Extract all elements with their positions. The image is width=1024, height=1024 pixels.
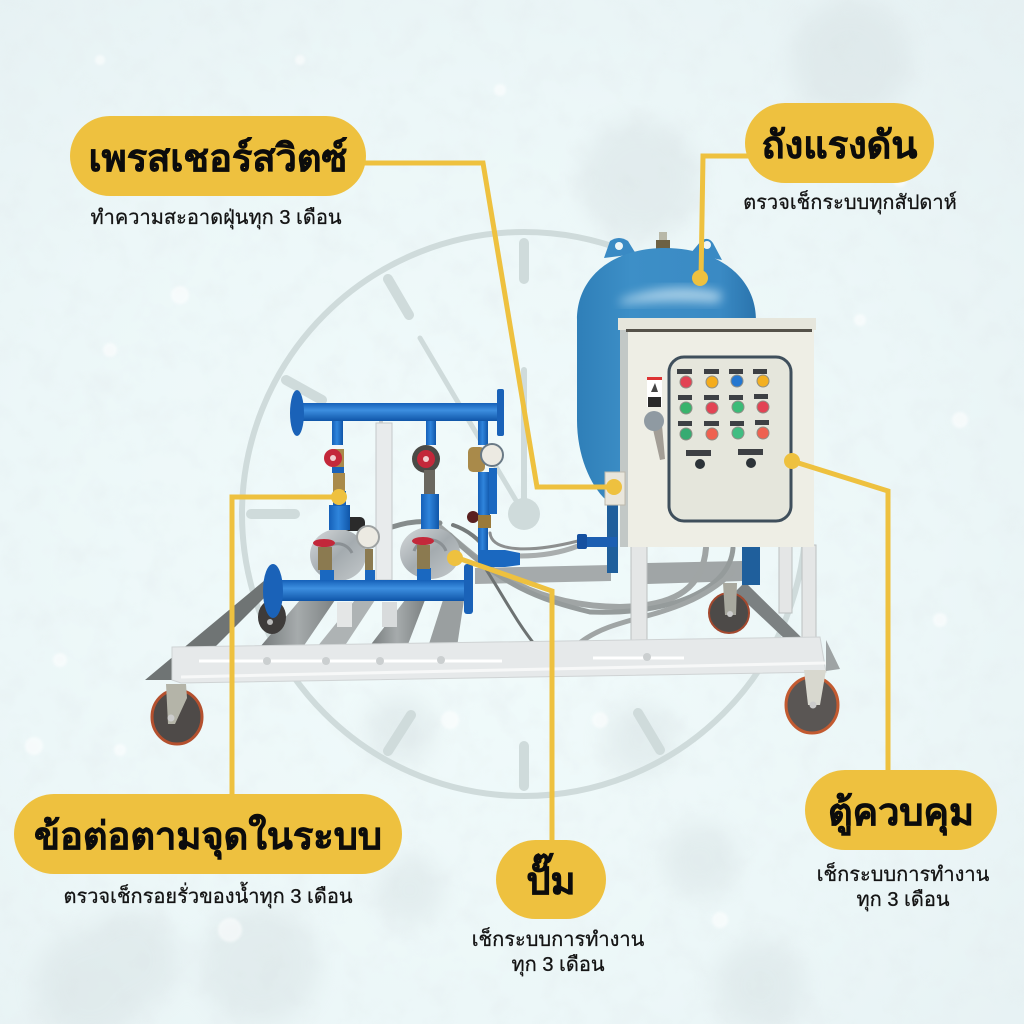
rear wheels [258, 583, 749, 634]
rear frame [145, 561, 804, 680]
rotary handle [644, 411, 665, 460]
text: control cabinet note: ทุก 3 เดือน [856, 889, 950, 911]
text: joints note: ตรวจเช็กรอยรั่วของน้ำทุก 3 เดือน [63, 886, 353, 908]
heading: pump: ปั๊ม [526, 861, 576, 903]
center support [376, 403, 392, 580]
front wheels [152, 670, 838, 744]
text: pump note [472, 927, 644, 976]
heading: pump [496, 840, 606, 919]
text: pressure tank note: ตรวจเช็กระบบทุกสัปดาห์ [743, 192, 957, 214]
heading: pressure switch: เพรสเชอร์สวิตซ์ [89, 138, 347, 180]
manifold top and risers [290, 389, 504, 530]
tank [577, 232, 760, 585]
pressure switch [577, 472, 625, 549]
heading: control cabinet [805, 770, 997, 850]
heading: pressure tank: ถังแรงดัน [762, 124, 917, 166]
text: control cabinet note: เช็กระบบการทำงาน [817, 864, 989, 886]
cabinet legs [631, 545, 816, 642]
text: pressure switch note: ทำความสะอาดฝุ่นทุก 3 เดือน [90, 207, 342, 229]
indicator lamps [677, 369, 769, 456]
hoses [392, 521, 733, 645]
control cabinet [618, 318, 816, 547]
warning sticker [647, 377, 662, 407]
heading: control cabinet: ตู้ควบคุม [828, 792, 974, 834]
manifold bottom [263, 564, 473, 627]
front beam [172, 637, 840, 683]
text: pump note: ทุก 3 เดือน [511, 954, 605, 976]
pumps [310, 517, 460, 581]
heading: joints [14, 794, 402, 874]
text: control cabinet note [817, 862, 989, 912]
heading: pressure switch [70, 116, 366, 196]
heading: pressure tank [745, 103, 934, 183]
heading: joints: ข้อต่อตามจุดในระบบ [34, 816, 382, 858]
text: pump note: เช็กระบบการทำงาน [472, 929, 644, 951]
gauge line [467, 444, 520, 567]
